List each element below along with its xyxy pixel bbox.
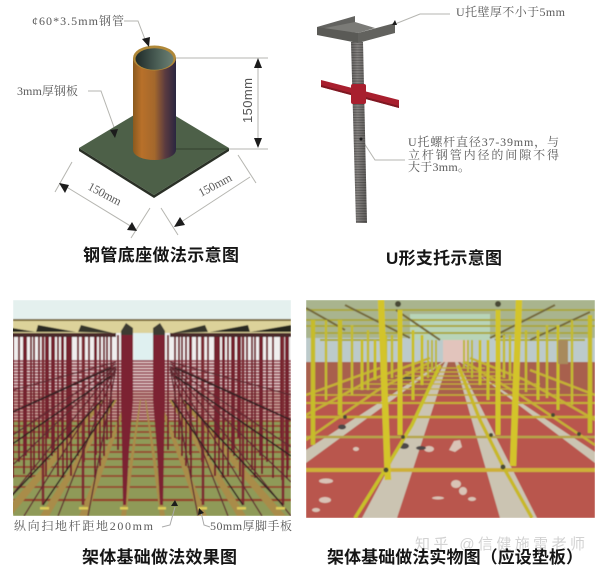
- icon: threaded rod: [351, 42, 367, 223]
- label: rod diameter note: 大于3mm。: [408, 159, 470, 174]
- panel: steel pipe base diagram: [17, 14, 268, 265]
- title: render: 架体基础做法效果图: [82, 548, 237, 567]
- worker: [558, 340, 568, 364]
- arrowheads: [360, 20, 397, 140]
- label: plate thickness: 3mm厚钢板: [17, 83, 78, 98]
- panel: U-shaped support diagram: [317, 4, 566, 268]
- label: left width 150mm: 150mm: [86, 179, 125, 209]
- label: wall thickness: U托壁厚不小于5mm: [456, 4, 566, 19]
- title: U support: U形支托示意图: [386, 248, 502, 268]
- leader lines: [362, 14, 450, 160]
- on-site photo illustration: [306, 300, 595, 518]
- label: rod diameter note: [408, 134, 559, 174]
- icon: steel pipe: [133, 46, 229, 160]
- watermark: 知乎 @信健施雷老师: [415, 536, 585, 553]
- callout: scaffold board: [198, 508, 292, 533]
- label: pipe size: ¢60*3.5mm钢管: [32, 14, 124, 28]
- label: right width 150mm: 150mm: [196, 170, 235, 200]
- 3D scaffold render: [0, 300, 291, 516]
- title: pipe base: 钢管底座做法示意图: [83, 245, 239, 265]
- callout: scaffold board: 50mm厚脚手板: [210, 518, 292, 533]
- panel: scaffold foundation 3D render: [0, 300, 292, 567]
- label: height 150mm: 150mm: [240, 78, 255, 123]
- label: rod diameter note: 立杆钢管内径的间隙不得: [408, 147, 559, 162]
- icon: green steel plate: [79, 103, 229, 198]
- title: photo: 架体基础做法实物图（应设垫板）: [327, 547, 583, 567]
- label: rod diameter note: U托螺杆直径37-39mm，与: [408, 134, 559, 149]
- icon: U bracket: [317, 16, 395, 43]
- panel: scaffold foundation photo: [306, 300, 595, 567]
- dimension and leader lines: [55, 21, 268, 238]
- arrowheads: [59, 37, 262, 231]
- icon: red handle nut: [321, 80, 399, 108]
- callout: sweeping pole height: [14, 500, 178, 533]
- callout: sweeping pole height: 纵向扫地杆距地200mm: [14, 518, 154, 533]
